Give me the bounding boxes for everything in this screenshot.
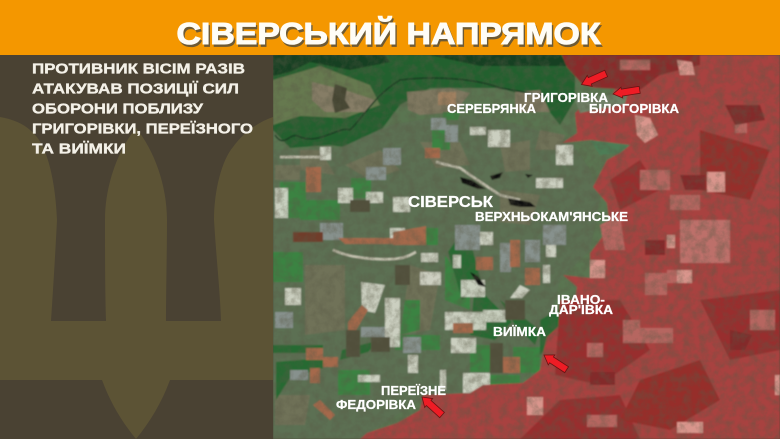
white fields: [275, 127, 573, 393]
header bar: [0, 0, 780, 55]
text block: summary: ТА ВИЇМКИ: [32, 140, 126, 158]
map labels: ВЕРХНЬОКАМ'ЯНСЬКЕ: [475, 209, 628, 224]
map labels: БІЛОГОРІВКА: [589, 101, 680, 116]
icon: trident watermark: [0, 117, 273, 439]
text block: summary: ГРИГОРІВКИ, ПЕРЕЇЗНОГО: [32, 120, 253, 138]
text block: summary: ПРОТИВНИК ВІСІМ РАЗІВ: [32, 62, 245, 78]
arrow: Pereizne: [418, 393, 446, 420]
green pocket: [591, 140, 628, 154]
muted fields: [680, 220, 730, 263]
map labels: ВИЇМКА: [493, 324, 547, 339]
map labels: ІВАНО-: [557, 292, 605, 307]
green fields: [273, 112, 540, 395]
dark ponds: [460, 172, 536, 287]
map labels: ГРИГОРІВКА: [524, 90, 609, 105]
forest: [273, 55, 575, 150]
arrow: Vyimka: [541, 350, 570, 375]
text block: summary: ОБОРОНИ ПОБЛИЗУ: [32, 102, 204, 118]
arrow: Hryhorivka north: [579, 68, 609, 90]
brown and orange fields: [306, 148, 540, 420]
text block: summary: [32, 62, 253, 158]
dark patches: [590, 105, 765, 385]
grey fields: [275, 118, 566, 380]
red occupied zone: [360, 55, 780, 439]
title: СІВЕРСЬКИЙ НАПРЯМОК: [178, 18, 602, 54]
dark forest strips: [273, 242, 560, 400]
map labels: ДАР'ІВКА: [549, 302, 614, 317]
map labels: СЕРЕБРЯНКА: [447, 101, 537, 116]
arrow: Hryhorivka east: [612, 84, 641, 99]
mosaic base: [343, 128, 474, 186]
left panel: [0, 55, 273, 439]
title: СІВЕРСЬКИЙ НАПРЯМОК: [176, 15, 601, 51]
map labels: ФЕДОРІВКА: [336, 397, 417, 412]
map labels: [336, 90, 680, 412]
text block: summary: АТАКУВАВ ПОЗИЦІЇ СИЛ: [32, 80, 239, 98]
dark fields: [346, 200, 525, 373]
white roads: [280, 157, 520, 259]
arrows: [418, 68, 641, 420]
satellite map: [273, 55, 780, 439]
map labels: ПЕРЕЇЗНЕ: [381, 383, 446, 398]
pink fields: [527, 60, 780, 433]
map labels: СІВЕРСЬК: [408, 194, 493, 211]
